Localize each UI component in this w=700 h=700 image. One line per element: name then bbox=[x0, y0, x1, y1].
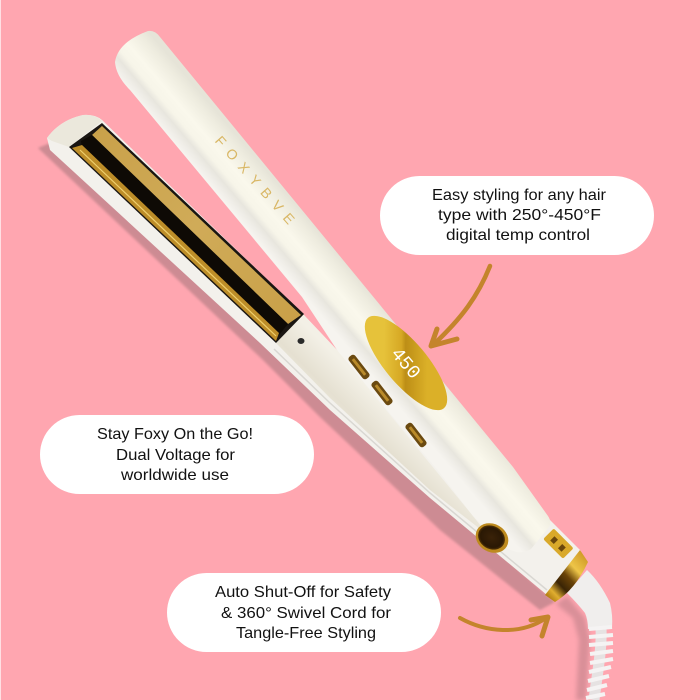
lock knob bbox=[470, 517, 514, 559]
pivot dot bbox=[298, 338, 304, 344]
display reading: 450 bbox=[386, 343, 425, 384]
gold edge highlight bbox=[80, 150, 276, 336]
heating plate bbox=[69, 123, 304, 343]
callout: digital temp control: digital temp control bbox=[446, 227, 590, 244]
beige handle panel bbox=[276, 314, 492, 540]
callout: dual voltage: Stay Foxy On the Go! bbox=[97, 426, 253, 443]
drop shadow under iron bbox=[38, 143, 555, 610]
brand name: FOXYBVE bbox=[212, 133, 298, 227]
lower arm body bbox=[47, 115, 581, 595]
callout: digital temp control: type with 250°-450°F bbox=[438, 207, 601, 224]
temperature display bbox=[352, 304, 460, 422]
gold flat band bbox=[92, 126, 301, 324]
callout: dual voltage: worldwide use bbox=[120, 467, 229, 484]
upper arm bbox=[115, 31, 550, 552]
lower arm edge crease bbox=[274, 349, 547, 590]
arrow: to swivel cord bbox=[460, 617, 548, 636]
gold switch plate bbox=[543, 528, 574, 559]
cord shadow bbox=[556, 596, 590, 700]
button: up bbox=[370, 380, 394, 406]
plate mirror dark bbox=[81, 135, 288, 335]
gold collar bbox=[545, 550, 588, 602]
callout: dual voltage bbox=[40, 415, 314, 494]
lower arm tip top face bbox=[47, 115, 102, 147]
cord strain relief bbox=[567, 570, 612, 629]
callout: digital temp control bbox=[380, 176, 654, 255]
arrow: to display bbox=[431, 266, 490, 346]
gold edge sliver bbox=[72, 145, 279, 341]
button: power bbox=[347, 354, 371, 380]
callout: auto shut-off: & 360° Swivel Cord for bbox=[221, 605, 392, 622]
callout: auto shut-off: Auto Shut-Off for Safety bbox=[215, 584, 391, 601]
callout: digital temp control: Easy styling for any hair bbox=[432, 187, 607, 204]
callout: dual voltage: Dual Voltage for bbox=[116, 447, 236, 464]
callout: auto shut-off bbox=[167, 573, 441, 652]
coiled cord bbox=[586, 627, 613, 700]
flat iron illustration bbox=[38, 31, 613, 700]
callout: auto shut-off: Tangle-Free Styling bbox=[236, 625, 376, 642]
plate black frame bbox=[69, 123, 304, 343]
left edge line bbox=[0, 0, 1, 700]
button: down bbox=[404, 422, 428, 448]
